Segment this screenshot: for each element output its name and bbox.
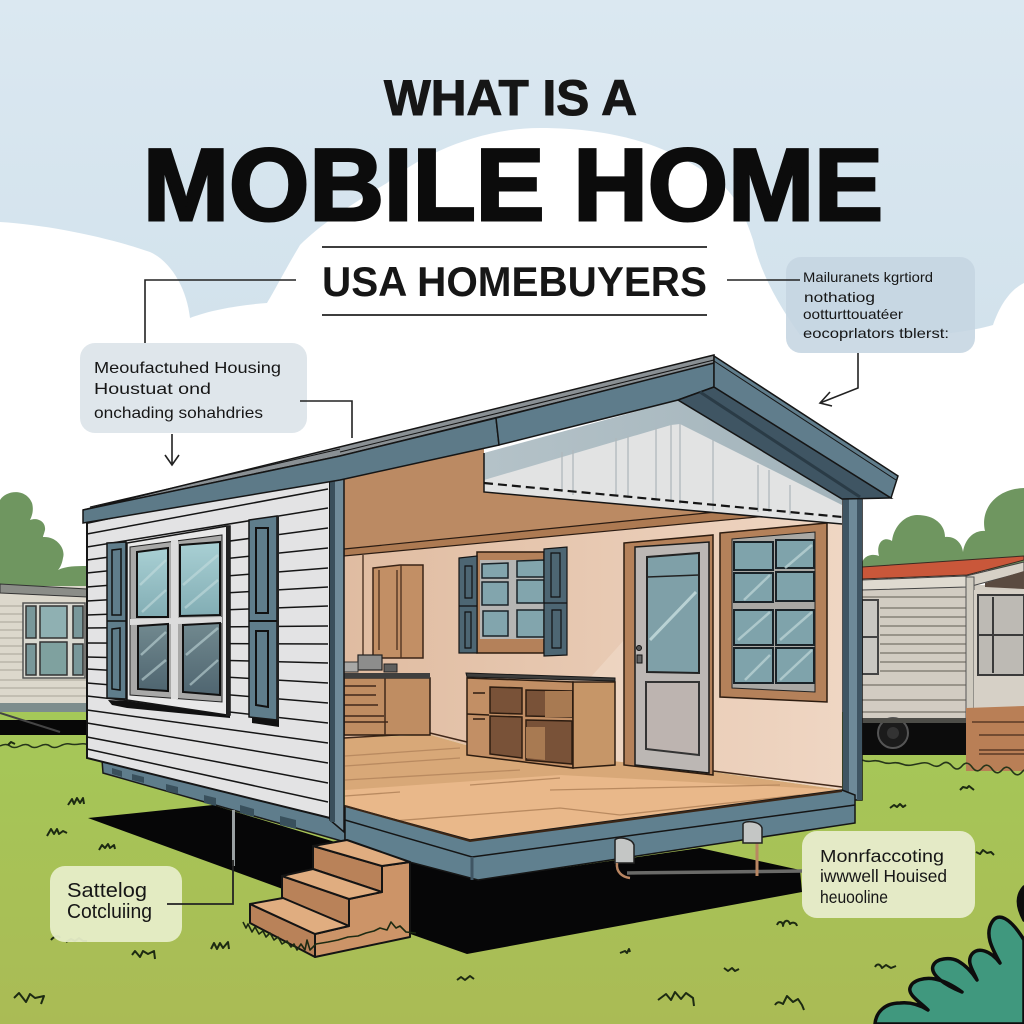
back window shutters bbox=[459, 547, 567, 656]
background tree right bbox=[862, 488, 1024, 570]
callout top right bbox=[727, 257, 975, 406]
roof fascia right bbox=[496, 363, 714, 445]
callout top right: ootturttouatéer bbox=[803, 306, 903, 322]
roof fascia left bbox=[83, 418, 499, 523]
gable soffit bbox=[484, 400, 842, 524]
front door bbox=[624, 535, 713, 775]
title: what is a: WHAT IS A bbox=[384, 70, 637, 126]
callout bottom right bbox=[802, 831, 975, 918]
background mobile home right bbox=[862, 556, 1024, 775]
side wall siding bbox=[87, 472, 330, 818]
back wall window bbox=[459, 547, 567, 656]
callout bottom right: Monrfaccoting bbox=[820, 846, 944, 866]
callout bottom left: Sattelog bbox=[67, 880, 147, 902]
right corner post bbox=[843, 490, 862, 800]
callout top right: eocoprlators tblerst: bbox=[803, 325, 949, 341]
subtitle with rules: USA HOMEBUYERS bbox=[322, 258, 707, 305]
open interior back wall bbox=[344, 510, 842, 790]
floor deck band bbox=[345, 790, 855, 880]
title: mobile home: MOBILE HOME bbox=[143, 128, 883, 242]
side window bbox=[108, 526, 230, 718]
left corner post bbox=[330, 472, 344, 832]
lower kitchen counter bbox=[344, 655, 430, 735]
callout top left: Houstuat ond bbox=[94, 381, 211, 398]
callout top left: Meoufactuhed Housing bbox=[94, 360, 281, 377]
left shutter bbox=[107, 542, 126, 699]
callout bottom left: Cotcluiing bbox=[67, 901, 152, 923]
grass tufts bbox=[8, 742, 994, 1010]
callout bottom left bbox=[50, 860, 233, 942]
roof rake fascia bbox=[714, 356, 898, 498]
background tree left bbox=[0, 492, 87, 590]
subtitle with rules bbox=[322, 247, 707, 315]
roof shingles bbox=[83, 355, 714, 510]
callout bottom right: heuooline bbox=[820, 887, 888, 907]
callout top left: onchading sohahdries bbox=[94, 405, 263, 422]
background mobile home left bbox=[0, 584, 90, 748]
right shutter bbox=[249, 516, 279, 727]
house ground shadow bbox=[88, 805, 802, 954]
plumbing connections bbox=[615, 822, 802, 878]
foreground bush bbox=[875, 887, 1024, 1024]
right interior window bbox=[720, 523, 827, 702]
callout bottom right: iwwwell Houised bbox=[820, 866, 947, 886]
upper kitchen cabinet bbox=[373, 565, 423, 658]
ceiling beam bbox=[344, 505, 842, 556]
ceiling bbox=[344, 445, 842, 555]
grass at steps bbox=[243, 922, 416, 950]
callout top left bbox=[80, 280, 352, 465]
support post bbox=[232, 810, 235, 866]
floor bbox=[344, 733, 842, 840]
entry steps bbox=[250, 840, 410, 957]
ground bbox=[0, 712, 1024, 1024]
skirting under left wall bbox=[102, 760, 345, 842]
callout top right: Mailuranets kgrtiord bbox=[803, 269, 933, 285]
callout top right: nothatiog bbox=[804, 289, 875, 305]
roof rake soffit bbox=[678, 387, 891, 499]
kitchen partition line bbox=[362, 555, 364, 662]
island cabinet bbox=[466, 673, 615, 768]
wall light patch bbox=[590, 640, 624, 765]
